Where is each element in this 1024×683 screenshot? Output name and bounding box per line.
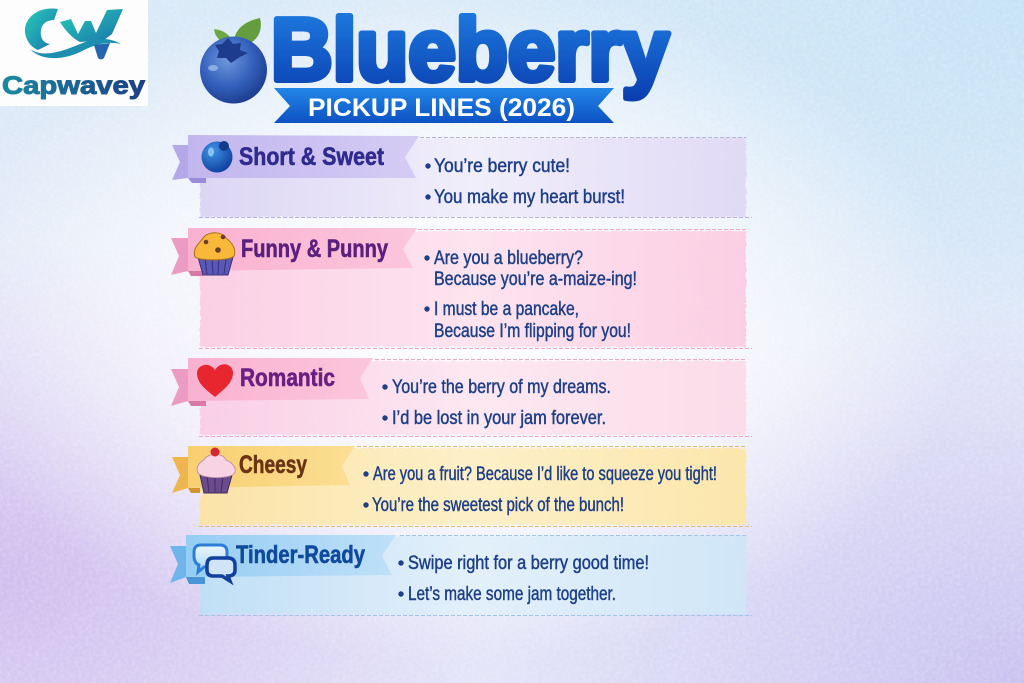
icon: CW wave mark: [25, 9, 123, 60]
ribbon tail: [172, 457, 188, 493]
lines: [424, 248, 637, 342]
lines: You make my heart burst!: [434, 187, 625, 208]
panel body: [200, 536, 746, 614]
panel: Cheesy: [172, 446, 752, 526]
lines: You’re the sweetest pick of the bunch!: [372, 495, 624, 516]
ribbon fold: [188, 271, 203, 276]
lines: Swipe right for a berry good time!: [408, 553, 649, 574]
lines: [363, 464, 717, 516]
lines: I’d be lost in your jam forever.: [392, 408, 606, 429]
icon: chat bubbles: [194, 545, 235, 581]
heading: Short & Sweet: [239, 143, 385, 171]
subtitle banner: [274, 88, 614, 123]
ribbon fold: [188, 401, 206, 406]
heading: Cheesy: [239, 451, 307, 479]
lines: Let’s make some jam together.: [408, 584, 616, 605]
panel: Short & Sweet: [172, 135, 752, 218]
logo wordmark: Capwavey: [2, 72, 145, 100]
ribbon fold: [188, 178, 206, 183]
lines: Are you a fruit? Because I’d like to squeeze you tight!: [373, 464, 717, 485]
panel body: [200, 138, 746, 217]
ribbon tail: [170, 546, 186, 583]
panel: Funny & Punny: [171, 228, 752, 348]
icon: cupcake: [197, 448, 235, 493]
ribbon: [188, 228, 417, 271]
heading: Romantic: [240, 364, 335, 392]
lines: [398, 553, 649, 605]
panel body: [200, 448, 746, 525]
ribbon tail: [172, 145, 188, 180]
ribbon fold: [188, 488, 200, 493]
lines: [425, 156, 625, 208]
ribbon: [188, 358, 373, 401]
ribbon tail: [171, 238, 188, 275]
icon: muffin: [194, 233, 235, 275]
icon: blueberry with leaves: [200, 18, 267, 104]
lines: Because I’m flipping for you!: [434, 321, 631, 342]
icon: heart: [197, 364, 233, 397]
title: Blueberry: [271, 0, 669, 99]
lines: Are you a blueberry?: [434, 248, 583, 269]
lines: I must be a pancake,: [434, 299, 579, 320]
ribbon: [186, 535, 396, 577]
lines: You’re the berry of my dreams.: [392, 377, 611, 398]
lines: You’re berry cute!: [434, 156, 570, 177]
lines: Because you’re a-maize-ing!: [434, 269, 637, 290]
ribbon fold: [186, 577, 205, 584]
ribbon: [188, 446, 355, 488]
panel: Romantic: [171, 358, 752, 436]
lines: [382, 377, 611, 429]
panel: Tinder-Ready: [170, 535, 752, 616]
ribbon tail: [171, 369, 188, 406]
subtitle banner: PICKUP LINES (2026): [308, 94, 575, 122]
heading: Tinder-Ready: [236, 541, 365, 569]
logo: Capwavey: [0, 0, 148, 106]
panel body: [200, 361, 746, 435]
heading: Funny & Punny: [241, 235, 388, 263]
panel body: [200, 231, 746, 347]
ribbon: [188, 135, 419, 178]
icon: small blueberry: [202, 141, 232, 172]
